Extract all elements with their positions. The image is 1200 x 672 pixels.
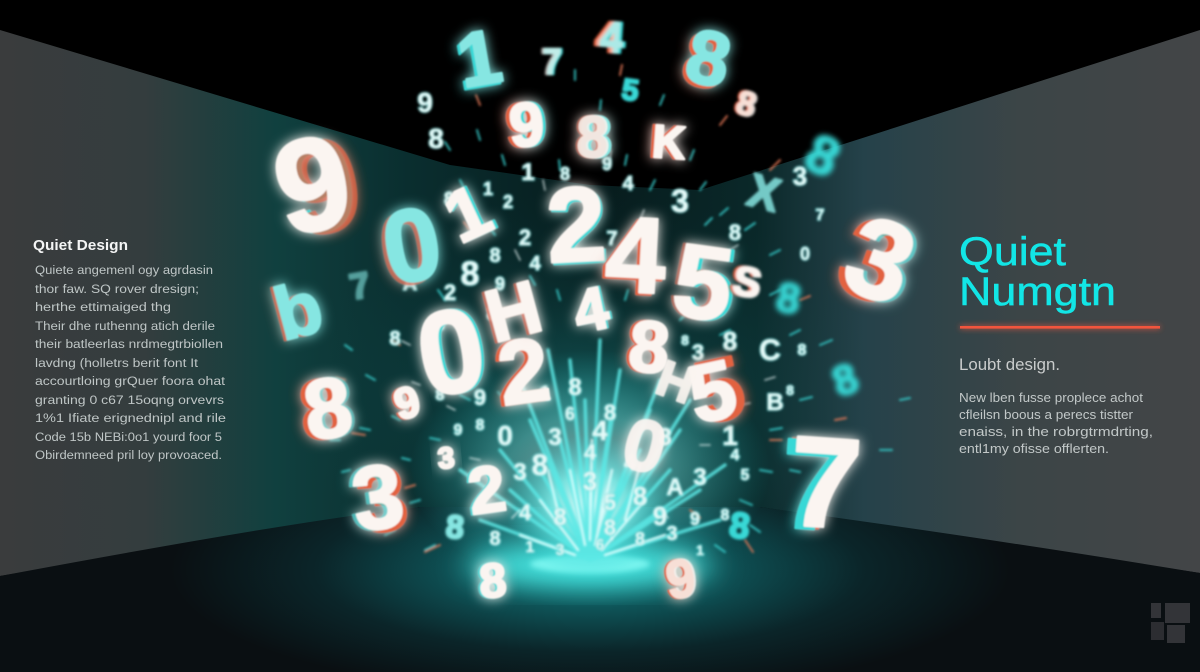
digit 9 left mid: 9 <box>387 377 423 430</box>
digit 4 center: 4 <box>567 274 615 346</box>
body text: left panel: granting 0 c67 15oqng orvevrs <box>35 393 224 407</box>
small digits swarm <box>389 87 825 559</box>
body text: left panel: Code 15b NEBi:0o1 yourd foor 5 <box>35 430 222 444</box>
small digits swarm: 4 <box>584 440 597 465</box>
digit 8 center: 8 <box>626 306 673 390</box>
small digits swarm: 8 <box>436 387 445 404</box>
digit 0 cyan: 0 <box>370 187 446 309</box>
digit 5 large: 5 <box>663 221 737 344</box>
digit 3 bottom left: 3 <box>346 445 410 551</box>
small digits swarm: 2 <box>503 192 513 212</box>
digit 5 orange: 5 <box>685 336 753 443</box>
small digits swarm: 3 <box>556 542 565 559</box>
digit 4 top: 4 <box>599 12 627 63</box>
small digits swarm: 4 <box>592 415 608 446</box>
digit 8 floor: 8 <box>476 554 506 609</box>
digit 0 cyan: 0 <box>374 184 450 307</box>
digit 2 large: 2 <box>544 165 609 286</box>
digit 0 white center: 0 <box>407 282 495 423</box>
digit 9: 9 <box>507 90 546 161</box>
small digits swarm: 3 <box>513 459 527 486</box>
small digits swarm: 8 <box>553 504 567 531</box>
body text: right panel: cfleilsn boous a perecs tistter <box>959 407 1134 422</box>
digit 2 orange: 2 <box>492 319 556 425</box>
digit 0 white center: 0 <box>410 281 498 423</box>
small digits swarm: 8 <box>532 449 548 482</box>
small digits swarm: 1 <box>521 159 535 186</box>
digit 2 large: 2 <box>546 166 611 287</box>
small digits swarm: 3 <box>548 424 562 451</box>
body text: left panel: Their dhe ruthenng atich derile <box>35 319 215 333</box>
small digits swarm: 4 <box>529 253 541 275</box>
subheading: Loubt design. <box>959 356 1060 374</box>
digit 9 large: 9 <box>272 107 374 266</box>
small digits swarm: 3 <box>793 161 807 191</box>
digit 8 pale: 8 <box>731 83 759 125</box>
digit 9 large: 9 <box>267 106 369 265</box>
small digits swarm: 9 <box>602 154 612 174</box>
small digits swarm: 7 <box>816 207 825 224</box>
digit 8 large left: 8 <box>298 358 358 458</box>
digit 3 large right: 3 <box>823 191 924 330</box>
small digits swarm: 2 <box>444 280 456 305</box>
digit 1: 1 <box>436 168 506 258</box>
digit 3 bottom left: 3 <box>350 448 414 554</box>
body text: left panel: lavdng (holletrs berit font It <box>35 356 199 370</box>
digit 5 small cyan: 5 <box>620 73 641 108</box>
letter X: X <box>743 163 786 222</box>
body text: left panel <box>35 263 226 462</box>
digit 7 small: 7 <box>543 41 563 82</box>
small digits swarm: 8 <box>723 326 737 356</box>
body text: right panel: enaiss, in the robrgtrmdrting, <box>959 424 1153 439</box>
small digits swarm: 3 <box>693 464 707 491</box>
small digits swarm: 9 <box>495 274 505 294</box>
digit 2 bottom: 2 <box>463 450 510 528</box>
small digits swarm: 3 <box>666 523 678 545</box>
body text: right panel: New lben fusse proplece achot <box>959 390 1143 405</box>
body text: right panel <box>959 390 1153 456</box>
digit 9 floor orange: 9 <box>662 547 701 611</box>
digit 8 cyan right: 8 <box>773 273 804 323</box>
small digits swarm: 6 <box>596 537 605 554</box>
small digits swarm: 0 <box>800 244 810 264</box>
small digits swarm: 1 <box>539 383 551 405</box>
small digits swarm: 8 <box>798 342 807 359</box>
body text: left panel: accourtloing grQuer foora ohat <box>35 374 226 388</box>
glyph b cyan left: b <box>263 265 328 357</box>
digit 8 floor: 8 <box>478 554 508 609</box>
small digits swarm: 8 <box>486 303 498 325</box>
small digits swarm: 4 <box>622 173 634 195</box>
small digits swarm: 8 <box>476 417 485 434</box>
small digits swarm: 6 <box>565 404 575 424</box>
small digits swarm: 4 <box>731 447 740 464</box>
body text: left panel: Obirdemneed pril loy provoaced. <box>35 448 222 462</box>
title: Quiet Numgtn: Numgtn <box>959 270 1116 314</box>
burst core <box>410 340 770 590</box>
digit 9: 9 <box>510 90 549 161</box>
small digits swarm: 8 <box>721 507 730 524</box>
small digits swarm: 1 <box>696 542 704 558</box>
small digits swarm: 8 <box>729 220 741 245</box>
body text: right panel: entl1my ofisse offlerten. <box>959 441 1109 456</box>
digit 8 floor cyan: 8 <box>445 508 465 546</box>
small digits swarm: 8 <box>489 528 501 550</box>
small digits swarm: 8 <box>489 245 501 267</box>
body text: left panel: Quiete angemenl ogy agrdasin <box>35 263 213 277</box>
body text: left panel: 1%1 Ifiate erignednipl and rile <box>35 411 226 425</box>
small digits swarm: 9 <box>454 422 463 439</box>
digit 0 pale center: 0 <box>615 403 674 491</box>
digit 8 cyan blurred right: 8 <box>796 122 849 189</box>
body text: left panel: thor faw. SQ rover dresign; <box>35 282 199 296</box>
digit 9 floor orange: 9 <box>660 548 699 611</box>
digit 8 cyan lower right: 8 <box>826 353 864 405</box>
digit 9: 9 <box>503 90 542 161</box>
small digits swarm: 8 <box>389 328 401 350</box>
digit 8: 8 <box>580 105 612 170</box>
small digits swarm: 8 <box>436 317 445 334</box>
cluster: numbers falling outward, large digits <box>261 12 935 611</box>
digit 4 center: 4 <box>569 273 617 346</box>
small digits swarm: 8 <box>568 374 582 401</box>
digit 9 left mid: 9 <box>389 376 425 430</box>
letter K: K <box>651 115 688 169</box>
small digits swarm: 4 <box>519 500 532 525</box>
digit 5 large: 5 <box>670 222 744 345</box>
small digits swarm: 9 <box>653 501 667 531</box>
small digits swarm: 5 <box>741 467 750 484</box>
glyph H center-right: H <box>649 350 702 415</box>
digit 4 top: 4 <box>593 12 621 63</box>
small digits swarm: 8 <box>681 332 689 348</box>
digit 8 large left: 8 <box>301 358 361 458</box>
digit 3 bottom left: 3 <box>342 446 406 552</box>
digit 8 large left: 8 <box>293 359 353 459</box>
panel: left text <box>33 238 226 462</box>
letter S orange: S <box>730 256 765 307</box>
title: Quiet Numgtn: Quiet <box>959 230 1066 274</box>
digit 2 bottom: 2 <box>461 450 508 529</box>
small digits swarm: 9 <box>690 509 700 529</box>
digit 7 large right: 7 <box>779 411 860 559</box>
digit 8 center: 8 <box>623 306 670 389</box>
glyph H: H <box>477 264 550 358</box>
small digits swarm: 8 <box>604 515 616 540</box>
digit 8: 8 <box>577 105 609 170</box>
digit 9 large: 9 <box>261 105 364 264</box>
digit 3 small: 3 <box>436 441 456 476</box>
digit 1 cyan: 1 <box>449 16 505 107</box>
small digits swarm: 8 <box>604 400 616 425</box>
digit 8 cyan top: 8 <box>675 15 734 107</box>
accent line <box>960 326 1160 329</box>
floor glow <box>465 547 715 583</box>
digit 7 large right: 7 <box>775 412 856 560</box>
digit 8 cyan lower center-right: 8 <box>727 504 753 547</box>
small digits swarm: 8 <box>444 189 454 209</box>
digit 4 large: 4 <box>600 194 666 318</box>
small digits swarm: A <box>666 474 684 501</box>
digit 2 orange: 2 <box>488 320 552 426</box>
digit 7 faint left: 7 <box>346 264 373 308</box>
panel: right text <box>959 230 1160 456</box>
small digits swarm: 8 <box>461 255 479 293</box>
small digits swarm: 4 <box>624 450 637 475</box>
letter K: K <box>648 115 685 169</box>
body text: left panel: their batleerlas nrdmegtrbiollen <box>35 337 223 351</box>
small digits swarm: 1 <box>722 420 738 451</box>
digit 5 orange: 5 <box>681 343 744 441</box>
digit 8: 8 <box>575 105 607 170</box>
digit 5 large: 5 <box>666 222 740 345</box>
small digits swarm: 3 <box>692 340 704 365</box>
glyph H: H <box>474 265 547 359</box>
glyph b cyan left: b <box>266 264 331 356</box>
digit 3 large right: 3 <box>833 192 935 331</box>
small digits swarm: 0 <box>714 295 726 320</box>
particles <box>330 65 910 552</box>
small digits swarm: B <box>766 389 784 416</box>
watermark mark <box>1151 603 1190 643</box>
digit 1: 1 <box>433 170 503 259</box>
small digits swarm: 8 <box>560 164 570 184</box>
small digits swarm: 2 <box>519 225 531 250</box>
small digits swarm: 8 <box>786 382 794 398</box>
digit 3 large right: 3 <box>830 190 931 329</box>
heading: Quiet Design: Quiet Design <box>33 238 128 254</box>
small digits swarm: 7 <box>606 228 618 250</box>
small digits swarm: 0 <box>497 420 513 451</box>
small digits swarm: 9 <box>417 87 433 118</box>
body text: left panel: herthe ettimaiged thg <box>35 300 171 314</box>
small digits swarm: 3 <box>671 183 689 219</box>
digit 8 cyan top: 8 <box>679 13 738 105</box>
digit 8 pale: 8 <box>733 84 761 125</box>
letter S orange: S <box>727 256 762 307</box>
small digits swarm: 9 <box>474 385 486 410</box>
small digits swarm: 8 <box>428 123 444 154</box>
small digits swarm: 3 <box>583 466 597 496</box>
digit 4 top: 4 <box>596 12 624 63</box>
title: Quiet Numgtn <box>959 230 1116 314</box>
small digits swarm: 8 <box>635 529 645 549</box>
digit 7 small: 7 <box>541 41 561 82</box>
small digits swarm: 8 <box>633 481 647 511</box>
digit 7 large right: 7 <box>785 410 866 557</box>
small digits swarm: 1 <box>483 179 493 199</box>
small digits swarm: 8 <box>658 424 672 451</box>
digit 4 large: 4 <box>603 193 669 317</box>
small digits swarm: A <box>403 273 417 295</box>
digit 1 cyan: 1 <box>451 13 508 104</box>
small digits swarm: 1 <box>526 539 535 556</box>
small digits swarm: C <box>759 334 781 367</box>
small digits swarm: 5 <box>604 490 616 515</box>
